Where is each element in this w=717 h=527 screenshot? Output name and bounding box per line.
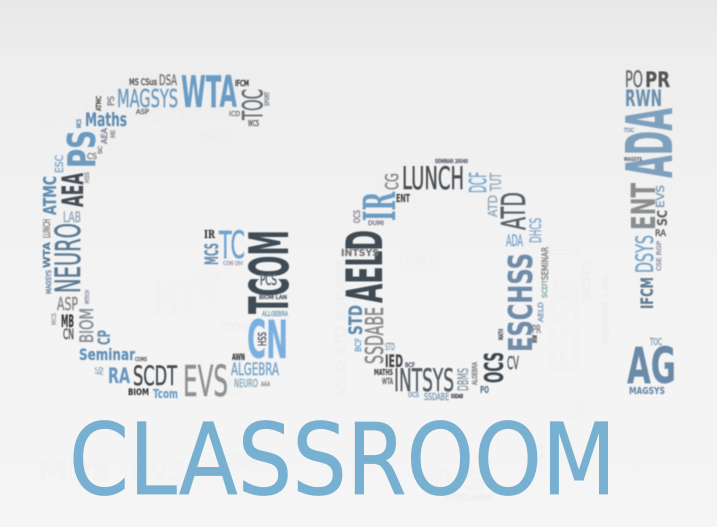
letter O word cloud: ENT [396,192,410,205]
letter G word cloud: IFCM [235,79,249,88]
word: SCDT: SCDT [133,361,177,392]
letter G word cloud: PCS [260,271,277,289]
word: AEA: AEA [56,173,90,207]
faint ghost words: SSDABE [445,493,495,502]
letter G word cloud: LUNCH [42,219,53,238]
letter O word cloud: WTA [382,377,393,386]
letter G word cloud: MS CSus [129,78,157,88]
letter G word cloud: AEA [100,127,109,144]
letter G word cloud: HSS [84,172,91,183]
faint ghost words: LUNCH [400,251,440,275]
letter G word cloud: SC [98,145,104,154]
letter G word cloud: AG [93,367,106,375]
faint ghost words: TC [195,268,220,309]
letter O word cloud: CV [507,353,519,374]
word: CP: CP [95,330,115,345]
word: OCS: OCS [480,352,510,383]
word: TOC: TOC [236,89,269,121]
letter O word cloud: SSDABE [424,392,449,403]
faint ghost words: MT [153,272,196,326]
letter O word cloud: ATD [486,195,500,217]
word: MAGSYS: MAGSYS [629,386,665,397]
exclamation mark word cloud: RA [655,229,667,239]
exclamation mark word cloud: CSE RGP [656,241,663,271]
word: EVS: EVS [183,357,228,407]
letter O word cloud: IED [385,352,403,372]
exclamation mark word cloud: EVS [654,185,667,208]
word: ATMC: ATMC [40,176,61,215]
word: ALGEBRA: ALGEBRA [231,360,279,380]
letter G word cloud: MCS [51,313,58,325]
faint ghost words: ESS [543,302,587,372]
word: DSYS: DSYS [631,235,659,273]
letter O word cloud: DCF [466,172,492,193]
letter O word cloud: DBMS [456,368,472,391]
faint ghost words: HCS [200,129,230,143]
letter G word cloud: AWN [232,353,245,363]
exclamation mark word cloud: ADA [614,108,688,178]
word: Tcom: Tcom [153,387,178,401]
letter O word cloud: STD [385,342,395,353]
letter G word cloud: ME [110,130,117,138]
letter O word cloud: SSDAB [451,394,463,400]
faint ghost words: WTA [150,103,205,127]
word: ENT: ENT [624,183,663,230]
faint ghost words: CEN [552,395,584,425]
word: LUNCH: LUNCH [402,161,464,197]
letter G word cloud: ICD [229,110,240,118]
word: PS: PS [60,130,104,168]
exclamation mark word cloud: TOC [623,128,634,134]
faint ghost words: DSA [97,73,127,98]
letter G word cloud: NEURO [234,377,258,390]
letter G word cloud: WCS [248,119,259,128]
word: ESC: ESC [53,155,66,173]
letter O word cloud: BCF [405,362,415,369]
word: ASP: ASP [57,294,78,315]
letter G word cloud [40,67,301,407]
letter O word cloud: AELD [537,302,545,322]
faint ghost words: IO [525,441,545,465]
faint ghost words: CON [222,322,252,333]
word: TC: TC [218,224,245,267]
letter G word cloud: MAGSYS [45,270,53,294]
title word: Go! word cloud [40,67,688,407]
letter O word cloud: OCS [353,210,363,223]
letter O word cloud [336,159,551,403]
faint ghost words: MACS [40,86,95,135]
faint ghost words: SCHO [582,260,593,300]
faint ghost words: ADA [552,278,578,306]
word: IR: IR [204,228,216,241]
letter G word cloud: COMS [135,357,147,363]
word: LAB: LAB [63,210,81,226]
letter O word cloud: SEMINAR 20040 [435,159,468,165]
word: AG: AG [627,337,676,395]
word: TOC: TOC [649,337,662,348]
word: ADA: ADA [506,231,523,250]
letter G word cloud: HSS [256,332,269,346]
exclamation mark word cloud: MAGSYS [624,157,642,163]
letter O word cloud: SCDT [541,279,549,298]
letter G word cloud: WTA [42,242,53,268]
letter G word cloud: TCOM [238,230,301,314]
letter O word cloud: AELD [336,230,394,303]
letter O word cloud: MATH [498,329,505,340]
faint ghost words: TE [77,461,108,486]
letter O word cloud: DUMI [368,220,384,227]
letter O word cloud: HW [531,335,539,343]
word: RWN: RWN [625,87,662,112]
letter O word cloud: MATHS [374,368,393,377]
letter G word cloud: SPORT [264,92,271,106]
word: SSDABE: SSDABE [360,307,389,364]
word: Seminar: Seminar [79,345,135,364]
faint ghost words [38,73,610,502]
word: IFCM: IFCM [638,277,658,309]
faint ghost words: MI [38,454,78,487]
faint ghost words: DVS [130,457,185,487]
word: STD: STD [345,305,367,335]
letter O word cloud: OCS [408,391,419,399]
letter G word cloud: MB [61,312,74,332]
letter G word cloud: CN [63,327,74,343]
letter G word cloud: CS [87,152,97,161]
faint ghost words: D [542,228,588,258]
letter O word cloud: DHCS [526,218,545,243]
word: RA: RA [108,364,130,388]
word: PO: PO [625,68,643,93]
word: BIOM: BIOM [76,308,98,343]
heading: CLASSROOM: CLASSROOM [69,403,616,518]
letter G word cloud: MCS [201,243,223,265]
letter G word cloud: CN [247,310,288,371]
letter G word cloud: PS [107,96,117,106]
letter G word cloud: MCS [76,119,83,128]
letter O word cloud: ALGEBRA [471,362,479,385]
exclamation mark word cloud: SC [656,210,671,226]
letter O word cloud: PO [480,385,489,396]
faint ghost words: DESIGN LAB [601,275,610,345]
faint ghost words: S [225,373,243,401]
word: Maths: Maths [85,109,127,131]
word: NEURO: NEURO [49,223,89,293]
faint ghost words: ORA [222,453,257,469]
letter G word cloud: MTECH [85,290,91,304]
letter G word cloud: ATMC [95,96,103,111]
word: MAGSYS: MAGSYS [117,84,178,113]
letter G word cloud: DSA [159,73,177,89]
letter G word cloud: BIOM [128,388,149,398]
letter O word cloud: CG [382,173,403,190]
word: IR: IR [355,192,406,221]
faint ghost words: NVS [420,467,485,497]
exclamation mark word cloud [614,68,688,397]
letter G word cloud: ALLGEBRA [262,310,288,318]
letter O word cloud: BCF [354,338,363,352]
word: PR: PR [645,68,670,92]
letter G word cloud: ASP [136,108,149,116]
letter O word cloud: SEMINAR [541,247,551,280]
word: INTSYS: INTSYS [394,363,454,399]
letter O word cloud: TUT [487,172,505,192]
faint ghost words: AELD STD SSDABE [334,260,348,400]
letter G word cloud: BIOM LAN [259,295,287,301]
word: ESCHSS: ESCHSS [501,253,540,352]
word: WTA: WTA [181,67,237,118]
letter O word cloud: PR [532,323,541,336]
word: ATD: ATD [494,192,533,230]
letter O word cloud: INTSYS [341,248,379,259]
letter G word cloud: AAA [261,381,271,388]
letter G word cloud: CON DIV [223,261,244,267]
